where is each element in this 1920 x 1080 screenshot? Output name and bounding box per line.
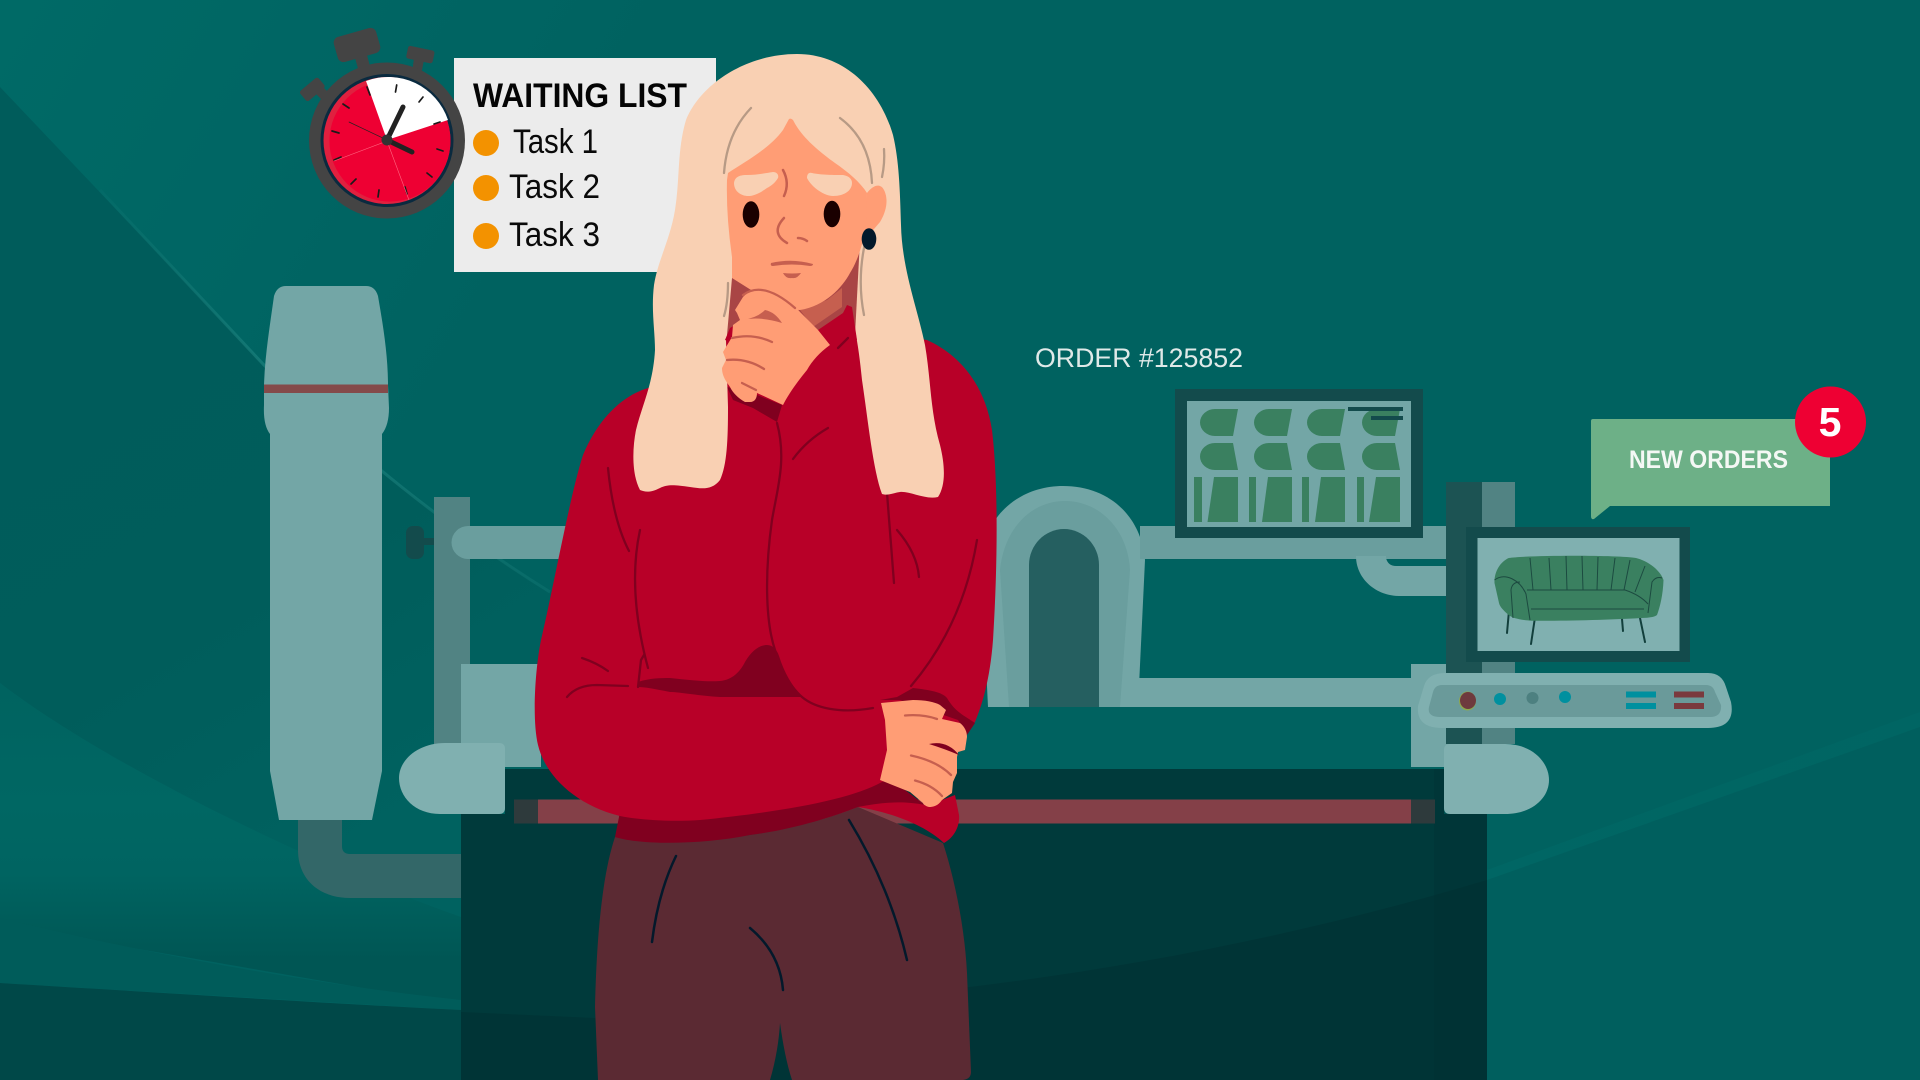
clock hands: [349, 107, 412, 152]
monitor: sofa: [1466, 527, 1690, 662]
trousers: [595, 807, 971, 1080]
mouth: [771, 261, 813, 278]
badge: [1795, 386, 1866, 458]
callout: new orders: [1591, 386, 1866, 519]
machine: desk: [461, 769, 1487, 1080]
badge: 5: [1819, 399, 1841, 445]
machine: left post: [434, 497, 470, 745]
sweater shadows: [638, 387, 975, 735]
ear: [862, 186, 887, 243]
monitor: order layout: [1175, 389, 1423, 538]
sweater lower right: [858, 795, 959, 843]
task 3: Task 3: [509, 216, 600, 254]
task 1: [473, 123, 598, 161]
neck: [727, 240, 860, 335]
task 2: [473, 168, 600, 206]
face: [727, 119, 867, 310]
arch door: [1029, 529, 1099, 707]
machine: pipe under tower: [298, 820, 470, 898]
machine: arch assembly: [981, 486, 1145, 707]
sweater hem: [615, 775, 925, 843]
control panel: [1418, 673, 1732, 728]
machine: lower bar: [1136, 678, 1414, 707]
task 3: [473, 216, 600, 254]
desk stripe: [514, 800, 1435, 824]
white wedge: [366, 77, 448, 140]
sweater folds: [567, 423, 977, 710]
earring: [862, 228, 876, 250]
eyes: [743, 201, 840, 228]
machine: block: [461, 664, 541, 767]
panel bars: [1626, 692, 1704, 709]
machine: tower: [264, 286, 389, 820]
machine: elbow pipe: [1356, 556, 1450, 596]
waiting list panel: [454, 58, 716, 272]
order number: ORDER #125852: [1035, 343, 1243, 373]
tower stripe: [264, 384, 388, 393]
panel buttons: [1459, 691, 1571, 710]
task 1: Task 1: [513, 123, 598, 161]
sweater: [535, 320, 997, 821]
machine: right post block: [1411, 664, 1451, 767]
face lines: [778, 170, 807, 243]
machine: upper bar right: [1140, 526, 1450, 559]
eyebrows: [734, 172, 852, 196]
machine: knob: [406, 526, 434, 559]
callout: new orders: NEW ORDERS: [1629, 446, 1788, 474]
icon: sofa: [1494, 556, 1664, 644]
hand on arm: [880, 700, 967, 807]
hair: [633, 54, 944, 498]
collar: [725, 305, 857, 350]
hair strands: [724, 108, 884, 316]
machine: right pad: [1444, 744, 1549, 814]
icon: stopwatch: [299, 26, 465, 218]
cut pattern pieces: [1194, 409, 1400, 522]
neck shadow: [800, 288, 842, 327]
hand on chin: [722, 287, 848, 405]
woman: [535, 54, 997, 1080]
machine: upper bar left: [452, 526, 620, 559]
ticks: [332, 85, 443, 197]
machine: left pad: [399, 743, 505, 814]
task 2: Task 2: [509, 168, 600, 206]
waiting list heading: WAITING LIST: [473, 77, 687, 115]
machine: right post: [1446, 482, 1515, 744]
status lines: [1348, 407, 1403, 420]
